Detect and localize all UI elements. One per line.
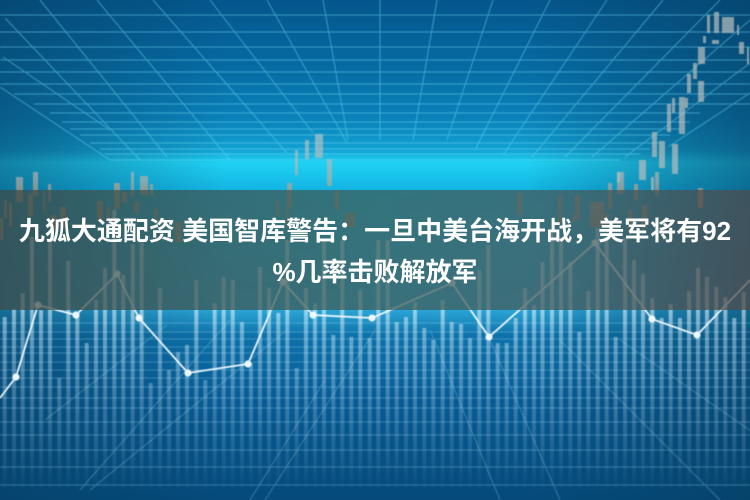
bar chart [5, 210, 744, 492]
upper perspective grid [0, 0, 750, 160]
grey candles [617, 12, 749, 191]
translucent title band [0, 190, 750, 310]
lower reflected grid [0, 320, 750, 500]
title [19, 216, 731, 287]
candlestick chart [0, 12, 749, 242]
title: 九狐大通配资 美国智库警告：一旦中美台海开战，美军将有92 [19, 216, 731, 246]
line chart [0, 239, 750, 398]
title: %几率击败解放军 [272, 257, 478, 287]
brown candles [0, 134, 703, 242]
